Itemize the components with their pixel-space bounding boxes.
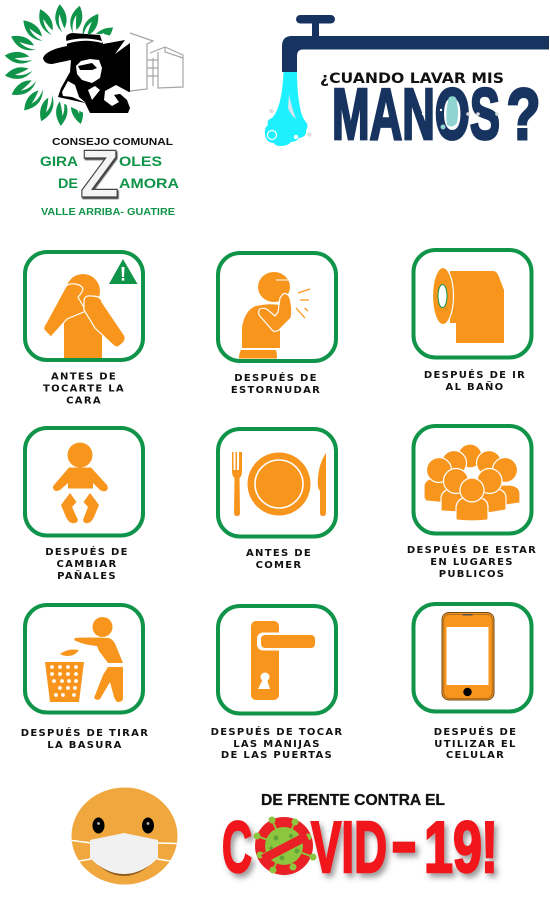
icon: person touching face (25, 252, 143, 360)
label: ANTES DE (51, 372, 117, 382)
logo text: Girazoles de Zamora: AMORA (119, 175, 179, 191)
logo text: Consejo Comunal: CONSEJO COMUNAL (52, 136, 174, 148)
icon: crossed-out virus (254, 816, 316, 875)
icon: soap bubbles in letter O (422, 96, 499, 130)
heading letters: - (391, 802, 417, 882)
slogan: de frente contra el: DE FRENTE CONTRA EL (261, 792, 445, 809)
icon: toilet paper roll (414, 250, 532, 358)
title: faucet and heading (265, 15, 549, 155)
label: PAÑALES (57, 569, 117, 582)
logo text: Girazoles de Zamora: OLES (119, 153, 162, 169)
label: DESPUÉS DE (45, 547, 129, 558)
label: DESPUÉS DE ESTAR (407, 545, 537, 556)
logo text: Girazoles de Zamora: GIRA (40, 153, 78, 169)
label: LA BASURA (47, 740, 123, 751)
label: PUBLICOS (439, 569, 505, 580)
label: DESPUÉS DE TIRAR (21, 728, 149, 739)
label: EN LUGARES (430, 557, 514, 568)
icon: portrait of man with hat (43, 33, 131, 114)
label: DESPUÉS DE TOCAR (211, 727, 343, 738)
panel: después de estar en lugares públicos (407, 426, 537, 580)
label: ESTORNUDAR (231, 385, 321, 396)
icon: crowd of people (414, 426, 532, 534)
icon: faucet (282, 15, 549, 72)
label: ANTES DE (246, 548, 312, 559)
logo text: Girazoles de Zamora: Z (80, 136, 119, 212)
logo text: Girazoles de Zamora (40, 136, 179, 212)
icon: person sneezing (218, 253, 336, 361)
icon: building line art (130, 33, 183, 91)
label: CELULAR (446, 750, 505, 761)
icon: face with mask (72, 788, 178, 884)
heading letters: 19 (424, 808, 482, 888)
heading letters: C (222, 808, 252, 888)
panel: después de ir al baño (414, 250, 532, 393)
panel: después de tirar la basura (21, 605, 149, 751)
panel: después de tocar las manijas de las puertas (211, 606, 343, 761)
heading: cuando lavar mis: ¿CUANDO LAVAR MIS (320, 71, 504, 87)
label: UTILIZAR EL (434, 739, 517, 750)
logo text: location: VALLE ARRIBA- GUATIRE (41, 207, 175, 218)
icon: person throwing trash (25, 605, 143, 712)
panel: después de cambiar pañales (25, 428, 143, 582)
heading letters: VID (311, 808, 387, 888)
label: DE LAS PUERTAS (221, 750, 333, 761)
label: DESPUÉS DE (234, 373, 318, 384)
logo: Consejo Comunal (4, 4, 183, 218)
panel: después de estornudar (218, 253, 336, 396)
label: COMER (256, 560, 302, 571)
icon: smartphone (414, 604, 532, 712)
icon: door handle (218, 606, 336, 714)
label: DESPUÉS DE (434, 727, 517, 738)
panel: después de utilizar el celular (414, 604, 532, 761)
icon: plate with fork and knife (218, 429, 336, 536)
label: CARA (66, 396, 102, 406)
slogan: covid-19 (222, 802, 498, 888)
icon: baby in diaper (25, 428, 143, 536)
label: LAS MANIJAS (233, 739, 321, 750)
heading: question mark: ? (506, 75, 540, 155)
heading letters (222, 802, 498, 888)
label: TOCARTE LA (43, 384, 125, 394)
label: DESPUÉS DE IR (424, 370, 526, 381)
icon: water stream (265, 72, 312, 146)
label: CAMBIAR (57, 559, 117, 570)
heading letters: O (272, 822, 296, 880)
label: AL BAÑO (446, 380, 504, 393)
panel: antes de comer (218, 429, 336, 571)
heading letters: ! (481, 808, 498, 888)
logo text: Girazoles de Zamora: DE (58, 175, 78, 191)
icon: sunflower petals (4, 4, 117, 126)
panel: antes de tocarte la cara (25, 252, 143, 406)
